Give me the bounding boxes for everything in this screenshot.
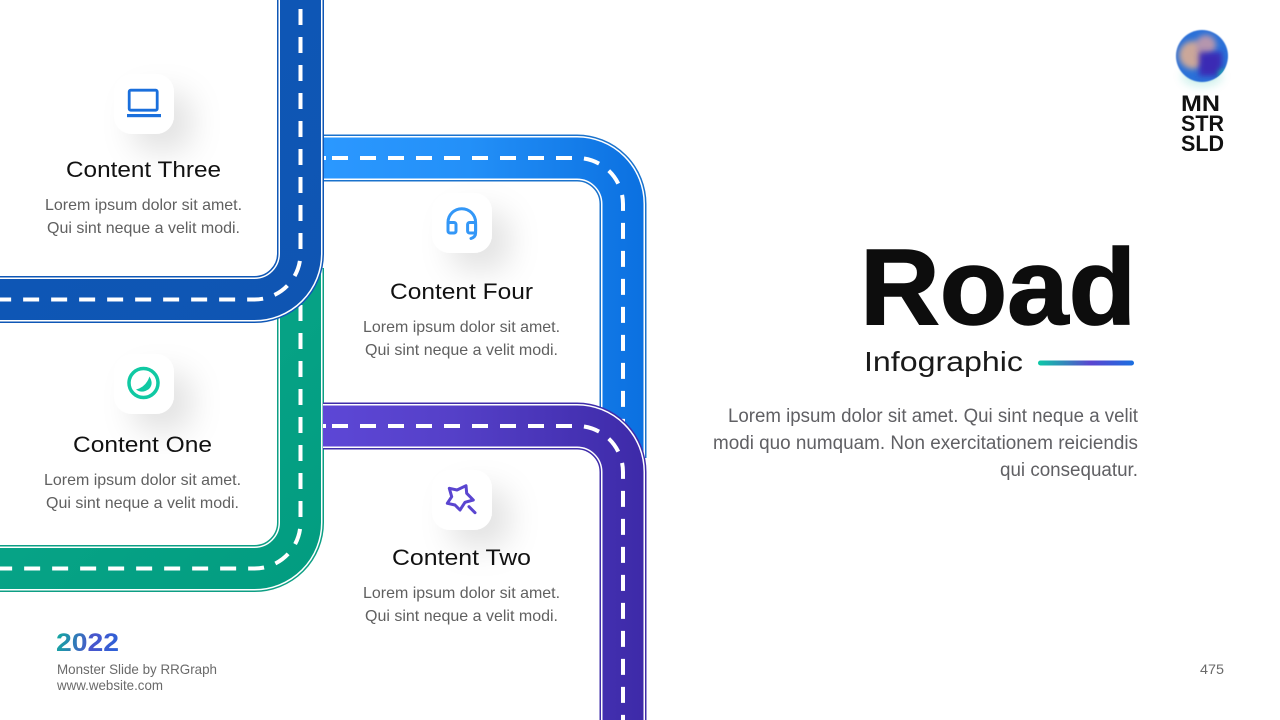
logo wordmark: SLD	[1181, 131, 1224, 156]
icon: moon circle	[114, 354, 174, 414]
heading: Content One	[73, 432, 212, 457]
road: light blue	[323, 158, 623, 458]
panel: content one	[44, 354, 241, 512]
icon: laptop	[114, 74, 174, 134]
text block	[363, 585, 560, 625]
panel: content two	[363, 470, 560, 625]
text block: Lorem ipsum dolor sit amet.	[44, 472, 241, 489]
footer credits	[56, 661, 217, 693]
text block	[45, 197, 242, 237]
description text: modi quo numquam. Non exercitationem reiciendis	[713, 433, 1138, 454]
footer year: 2022	[56, 629, 119, 657]
text block: Qui sint neque a velit modi.	[47, 220, 240, 237]
road: green	[0, 268, 300, 568]
logo wordmark: MN	[1181, 91, 1220, 116]
text block: Qui sint neque a velit modi.	[365, 342, 558, 359]
footer credits: www.website.com	[56, 677, 163, 693]
text block: Lorem ipsum dolor sit amet.	[45, 197, 242, 214]
logo	[1176, 30, 1228, 156]
description text: qui consequatur.	[1000, 460, 1138, 481]
page number: 475	[1200, 661, 1224, 677]
text block	[363, 319, 560, 359]
icon: logo sphere	[1176, 30, 1228, 86]
logo wordmark	[1181, 91, 1224, 156]
footer credits: Monster Slide by RRGraph	[57, 661, 217, 677]
panel: content three	[45, 74, 242, 237]
heading: Content Four	[390, 279, 533, 304]
text block: Lorem ipsum dolor sit amet.	[363, 319, 560, 336]
heading: Content Two	[392, 545, 531, 570]
description text: Lorem ipsum dolor sit amet. Qui sint neque a velit	[728, 406, 1139, 427]
subtitle: Infographic	[864, 346, 1023, 377]
panel: content four	[363, 193, 560, 359]
heading: Content Three	[66, 157, 221, 182]
logo wordmark: STR	[1181, 111, 1224, 136]
icon: headset	[432, 193, 492, 253]
text block: Qui sint neque a velit modi.	[365, 608, 558, 625]
description text	[713, 406, 1139, 481]
icon: magic star	[432, 470, 492, 530]
text block: Qui sint neque a velit modi.	[46, 495, 239, 512]
road: dark blue	[0, 0, 300, 300]
text block: Lorem ipsum dolor sit amet.	[363, 585, 560, 602]
road: purple	[323, 426, 623, 720]
title: Road	[860, 226, 1136, 347]
text block	[44, 472, 241, 512]
accent line	[1038, 360, 1134, 366]
